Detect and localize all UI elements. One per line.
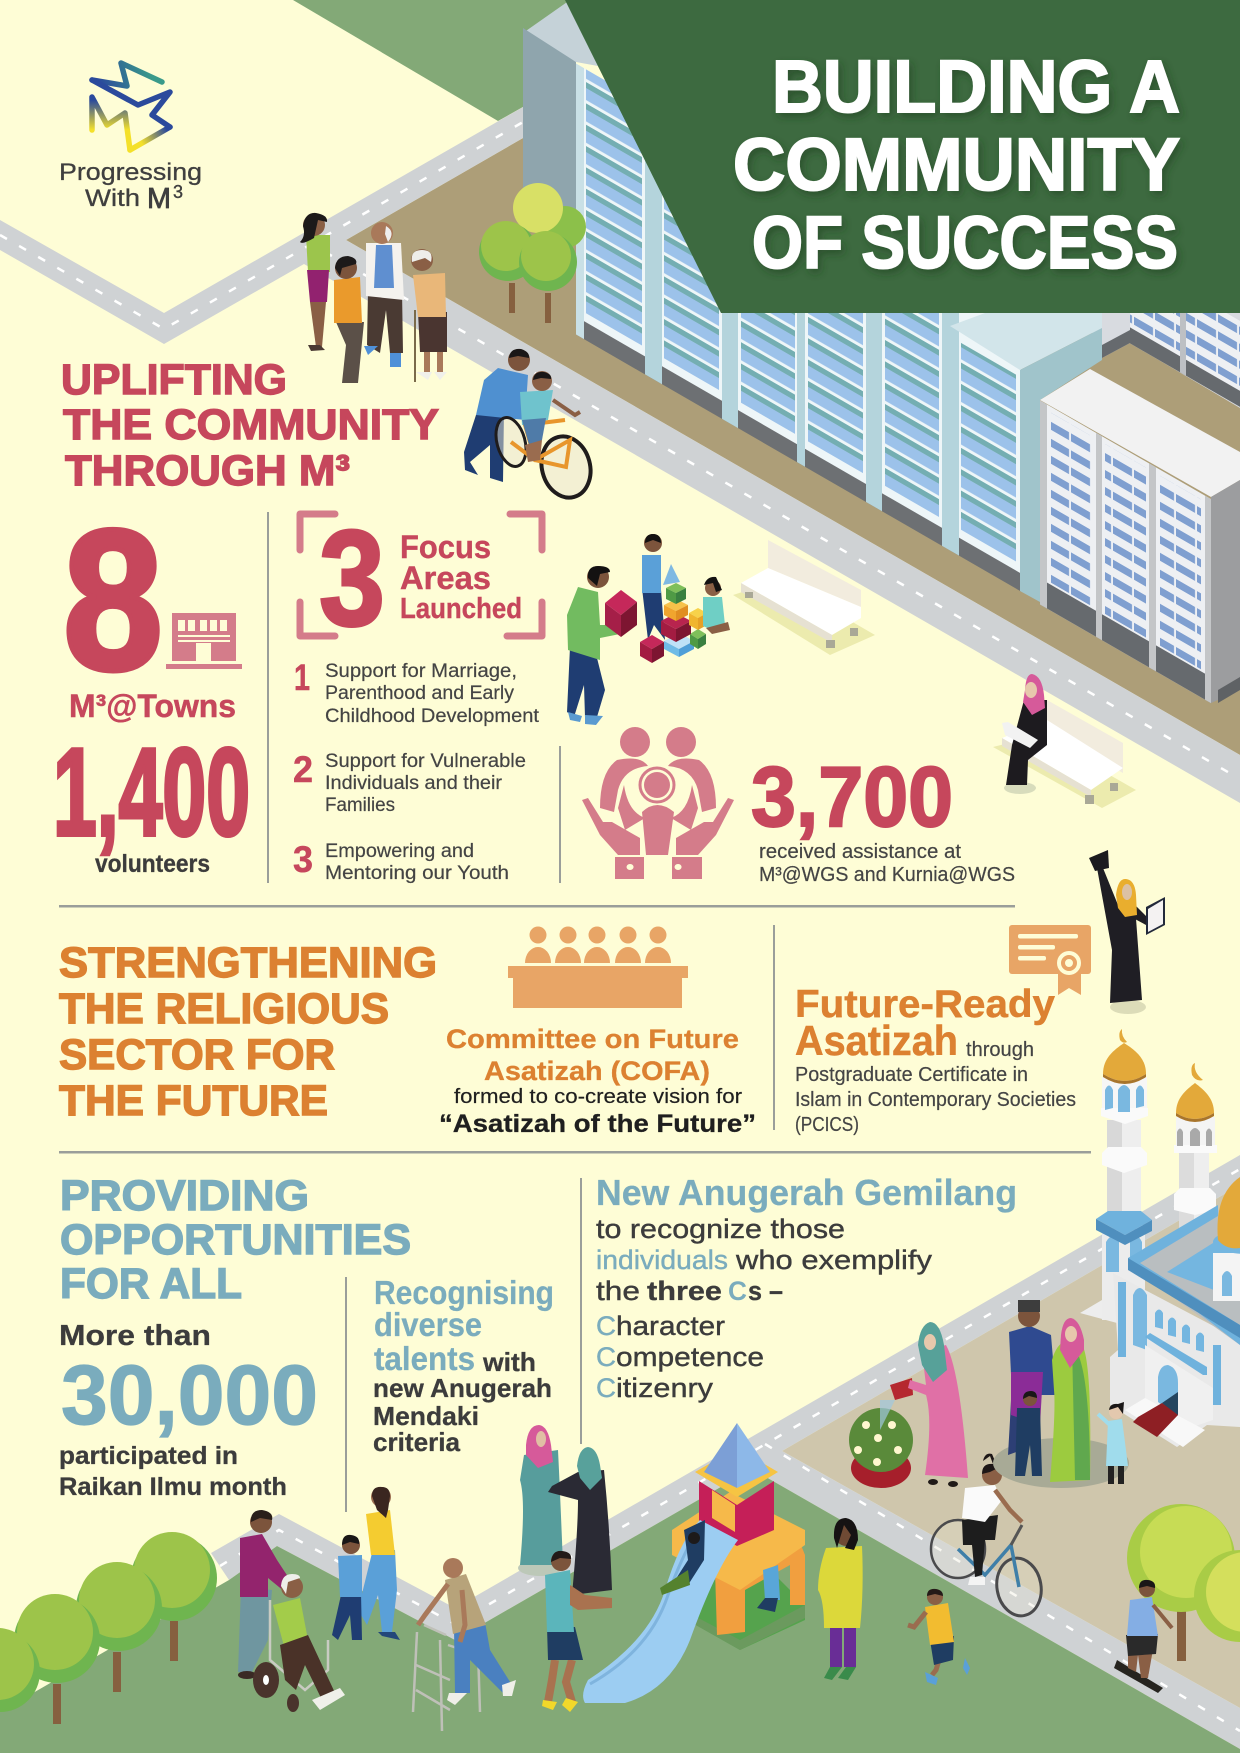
- trees at bottom left: [0, 1532, 217, 1724]
- stat: 30,000 participants: 30,000: [61, 1348, 318, 1442]
- bench with woman on laptop: [993, 674, 1136, 808]
- woman watering plant: [849, 1322, 968, 1488]
- new anugerah gemilang: C: [728, 1276, 747, 1306]
- old man with walker: [413, 1558, 516, 1731]
- stat: 3,700: M³@WGS and Kurnia@WGS: [759, 864, 1015, 886]
- focus area 1: Parenthood and Early: [325, 683, 515, 704]
- skateboarder: [1114, 1580, 1172, 1693]
- committee text: formed to co-create vision for: [454, 1086, 742, 1108]
- stat: 30,000 participants: participated in: [59, 1442, 238, 1470]
- new anugerah gemilang: the: [596, 1276, 640, 1306]
- section heading: SECTOR FOR: [59, 1031, 335, 1079]
- top scene: lawn, ground and road: [0, 0, 1240, 803]
- section heading: [59, 939, 437, 1125]
- section: strengthening religious sector: [59, 925, 1091, 1138]
- cyclist: [931, 1454, 1046, 1619]
- stat: 1,400 volunteers: [53, 724, 250, 878]
- 3 focus areas: Areas: [400, 560, 491, 596]
- focus area 2: 2: [293, 749, 313, 790]
- 3 focus areas: Focus: [400, 529, 491, 565]
- future-ready asatizah text: (PCICS): [795, 1114, 859, 1136]
- future-ready asatizah text: through: [966, 1039, 1034, 1061]
- new anugerah gemilang: ompetence: [616, 1342, 764, 1372]
- stat: 30,000 participants: More than: [59, 1320, 211, 1352]
- 3 focus areas: Launched: [400, 593, 522, 625]
- family standing: [993, 1300, 1129, 1488]
- focus area 1: [294, 657, 540, 727]
- section: uplifting the community: [53, 356, 1015, 886]
- stat: 3,700: received assistance at: [759, 841, 961, 863]
- new anugerah gemilang: New Anugerah Gemilang: [596, 1172, 1017, 1213]
- bench near road: [733, 540, 875, 655]
- title: BUILDING A: [772, 45, 1180, 128]
- trees at bottom right: [1127, 1504, 1240, 1661]
- recognising diverse talents: [373, 1274, 554, 1457]
- recognising diverse talents: talents: [374, 1340, 475, 1377]
- new anugerah gemilang: C: [596, 1373, 616, 1403]
- future-ready asatizah text: Asatizah: [795, 1017, 958, 1064]
- recognising diverse talents: diverse: [374, 1306, 482, 1343]
- committee text: Committee on Future: [446, 1024, 739, 1054]
- boy in teal vest: [542, 1551, 612, 1712]
- future-ready asatizah text: Postgraduate Certificate in: [795, 1064, 1028, 1086]
- pregnant woman: [818, 1518, 863, 1680]
- section heading: OPPORTUNITIES: [60, 1216, 411, 1264]
- family playing with blocks: [567, 534, 730, 725]
- 3 focus areas: 3: [319, 502, 385, 654]
- title: COMMUNITY: [733, 123, 1180, 206]
- two women talking: [518, 1425, 612, 1595]
- new anugerah gemilang: individuals: [596, 1245, 728, 1275]
- icon: corner brackets: [300, 514, 542, 636]
- stat: 3,700: 3,700: [751, 750, 953, 845]
- focus area 3: [293, 839, 509, 884]
- new anugerah gemilang: to recognize those: [596, 1214, 845, 1244]
- section heading: THE RELIGIOUS: [59, 985, 389, 1033]
- recognising diverse talents: Recognising: [374, 1274, 554, 1311]
- mosque body: [1110, 1177, 1240, 1447]
- focus area 2: Support for Vulnerable: [325, 751, 526, 772]
- section heading: UPLIFTING: [61, 356, 287, 404]
- stat: 8 towns: M³@Towns: [69, 688, 236, 724]
- recognising diverse talents: Mendaki: [373, 1401, 479, 1431]
- boy running: [908, 1589, 970, 1685]
- icon: town building: [166, 613, 242, 669]
- logo: Progressing With M3: 3: [173, 182, 183, 202]
- new anugerah gemilang: C: [596, 1342, 616, 1372]
- recognising diverse talents: with: [482, 1347, 536, 1377]
- new anugerah gemilang: haracter: [616, 1311, 725, 1341]
- bottom scene: roads, plaza and lawn: [0, 1155, 1240, 1753]
- new anugerah gemilang: C: [596, 1311, 616, 1341]
- logo mark: [92, 63, 170, 150]
- stat: 3,700: [751, 750, 1015, 886]
- new anugerah gemilang: s –: [748, 1276, 783, 1306]
- focus area 2: [293, 749, 526, 816]
- recognising diverse talents: criteria: [373, 1427, 461, 1457]
- focus area 2: Families: [325, 795, 395, 816]
- new anugerah gemilang: itizenry: [616, 1373, 714, 1403]
- focus area 1: 1: [294, 657, 310, 698]
- section heading: [60, 1172, 411, 1308]
- stat: 30,000 participants: Raikan Ilmu month: [59, 1473, 287, 1501]
- icon: committee table: [508, 926, 688, 1008]
- logo: Progressing With M3: [59, 63, 202, 215]
- graduate with certificate: [1089, 850, 1165, 1014]
- new anugerah gemilang: who exemplify: [735, 1245, 933, 1275]
- 3 focus areas: [300, 502, 542, 654]
- logo: Progressing With M3: M: [147, 183, 171, 215]
- second minaret: [1174, 1063, 1217, 1243]
- section heading: THE FUTURE: [59, 1077, 328, 1125]
- future-ready asatizah text: Islam in Contemporary Societies: [795, 1089, 1076, 1111]
- icon: family in hands: [582, 727, 734, 879]
- apartment blocks: [523, 0, 1240, 718]
- stat: 30,000 participants: [59, 1320, 318, 1501]
- people chatting: [300, 213, 447, 383]
- first minaret: [1080, 1029, 1152, 1335]
- section heading: THE COMMUNITY: [63, 401, 439, 449]
- logo: Progressing With M3: With: [85, 185, 140, 212]
- stat: 1,400 volunteers: 1,400: [53, 724, 250, 862]
- icon: certificate: [1009, 925, 1091, 995]
- father and son on bicycle: [464, 349, 597, 503]
- section heading: [61, 356, 439, 495]
- man pushing wheelchair: [238, 1510, 345, 1712]
- committee text: [439, 1024, 756, 1138]
- logo text: Progressing: [59, 159, 202, 186]
- focus area 1: Support for Marriage,: [325, 661, 517, 682]
- section heading: PROVIDING: [60, 1172, 309, 1220]
- focus area 3: Mentoring our Youth: [325, 863, 509, 884]
- stat: 1,400 volunteers: volunteers: [95, 850, 210, 878]
- future-ready asatizah text: [795, 983, 1076, 1136]
- committee text: “Asatizah of the Future”: [439, 1110, 756, 1138]
- section heading: STRENGTHENING: [59, 939, 437, 987]
- focus area 3: 3: [293, 839, 313, 880]
- recognising diverse talents: new Anugerah: [373, 1373, 552, 1403]
- focus area 3: Empowering and: [325, 841, 474, 862]
- focus area 1: Childhood Development: [325, 706, 540, 727]
- section: providing opportunities: [59, 1172, 1017, 1512]
- title: OF SUCCESS: [752, 201, 1178, 284]
- section heading: FOR ALL: [60, 1260, 242, 1308]
- committee text: Asatizah (COFA): [484, 1056, 710, 1086]
- red block held: [605, 590, 637, 637]
- focus area 2: Individuals and their: [325, 773, 503, 794]
- stat: 8 towns: [63, 489, 242, 724]
- playground: [583, 1423, 805, 1703]
- future-ready asatizah text: Future-Ready: [795, 983, 1055, 1026]
- woman and boy walking: [332, 1487, 400, 1640]
- section heading: THROUGH M³: [65, 447, 350, 495]
- new anugerah gemilang: [596, 1172, 1017, 1403]
- stat: 8 towns: 8: [63, 489, 163, 712]
- trees near flats: [479, 183, 586, 323]
- title: [733, 45, 1180, 284]
- new anugerah gemilang: three: [647, 1276, 722, 1306]
- mosque: [1080, 1029, 1240, 1447]
- title banner: [565, 0, 1240, 313]
- block stack: [640, 583, 707, 663]
